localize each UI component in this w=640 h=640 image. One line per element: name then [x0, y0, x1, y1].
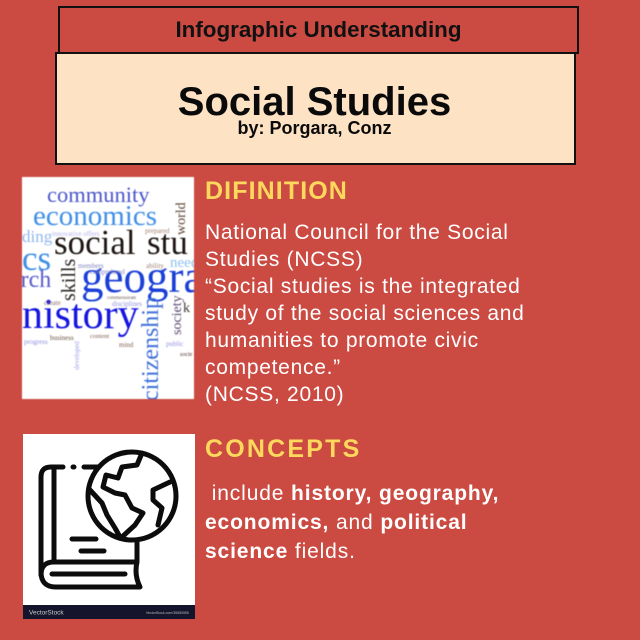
- word cloud image: stu: [147, 223, 188, 262]
- word cloud image: public: [166, 340, 184, 348]
- concepts text: economics, and political: [205, 511, 468, 534]
- word cloud image: ability: [146, 262, 164, 270]
- word cloud image: [21, 176, 195, 400]
- definition text: “Social studies is the integrated: [205, 275, 521, 298]
- watermark bar: VectorStock.com/35583955: [146, 611, 189, 615]
- title panel: [55, 52, 576, 165]
- watermark bar: VectorStock: [29, 610, 64, 616]
- concepts text: include history, geography,: [212, 482, 499, 505]
- rotated words: society: [170, 295, 185, 335]
- word cloud image: socie: [180, 352, 193, 358]
- icon: book and globe: [23, 434, 195, 619]
- concepts text: [205, 482, 499, 563]
- definition text: [205, 221, 525, 406]
- rotated words: k: [183, 301, 190, 316]
- word cloud image: ding: [22, 227, 53, 246]
- concepts text: science fields.: [205, 540, 356, 563]
- rotated words: developed: [73, 341, 81, 370]
- watermark bar: [23, 605, 195, 619]
- rotated words: [58, 202, 190, 401]
- definition text: competence.”: [205, 356, 341, 379]
- word cloud image: members: [78, 262, 104, 270]
- rotated words: skills: [58, 259, 80, 301]
- definition text: National Council for the Social: [205, 221, 509, 244]
- word cloud image: commensurate: [107, 296, 137, 301]
- definition text: study of the social sciences and: [205, 302, 525, 325]
- word cloud image: disciplines: [112, 300, 142, 308]
- title: Social Studies: [178, 80, 451, 124]
- word cloud image: innovative offers: [52, 230, 100, 238]
- word cloud image: community: [47, 182, 150, 207]
- definition text: Studies (NCSS): [205, 248, 363, 271]
- header band: [58, 6, 579, 54]
- word cloud image: content: [90, 333, 109, 340]
- word cloud image: prepared: [145, 227, 170, 235]
- header text: Infographic Understanding: [175, 17, 462, 42]
- definition text: (NCSS, 2010): [205, 383, 344, 406]
- word cloud image: business: [50, 334, 74, 342]
- definition heading: DIFINITION: [205, 177, 348, 205]
- word cloud image: nistory: [22, 292, 139, 338]
- rotated words: world: [174, 202, 189, 235]
- byline: by: Porgara, Conz: [237, 118, 392, 138]
- word cloud image: economics: [33, 200, 157, 232]
- word cloud image: mind: [119, 341, 134, 349]
- definition text: humanities to promote civic: [205, 329, 479, 352]
- word cloud image: comprehend: [90, 268, 125, 276]
- concepts heading: CONCEPTS: [205, 435, 362, 463]
- word cloud image: cs: [22, 239, 51, 278]
- rotated words: citizenship: [138, 297, 164, 399]
- word cloud image: create: [44, 299, 61, 307]
- word cloud image: social: [54, 223, 136, 262]
- word cloud image: progress: [24, 338, 48, 346]
